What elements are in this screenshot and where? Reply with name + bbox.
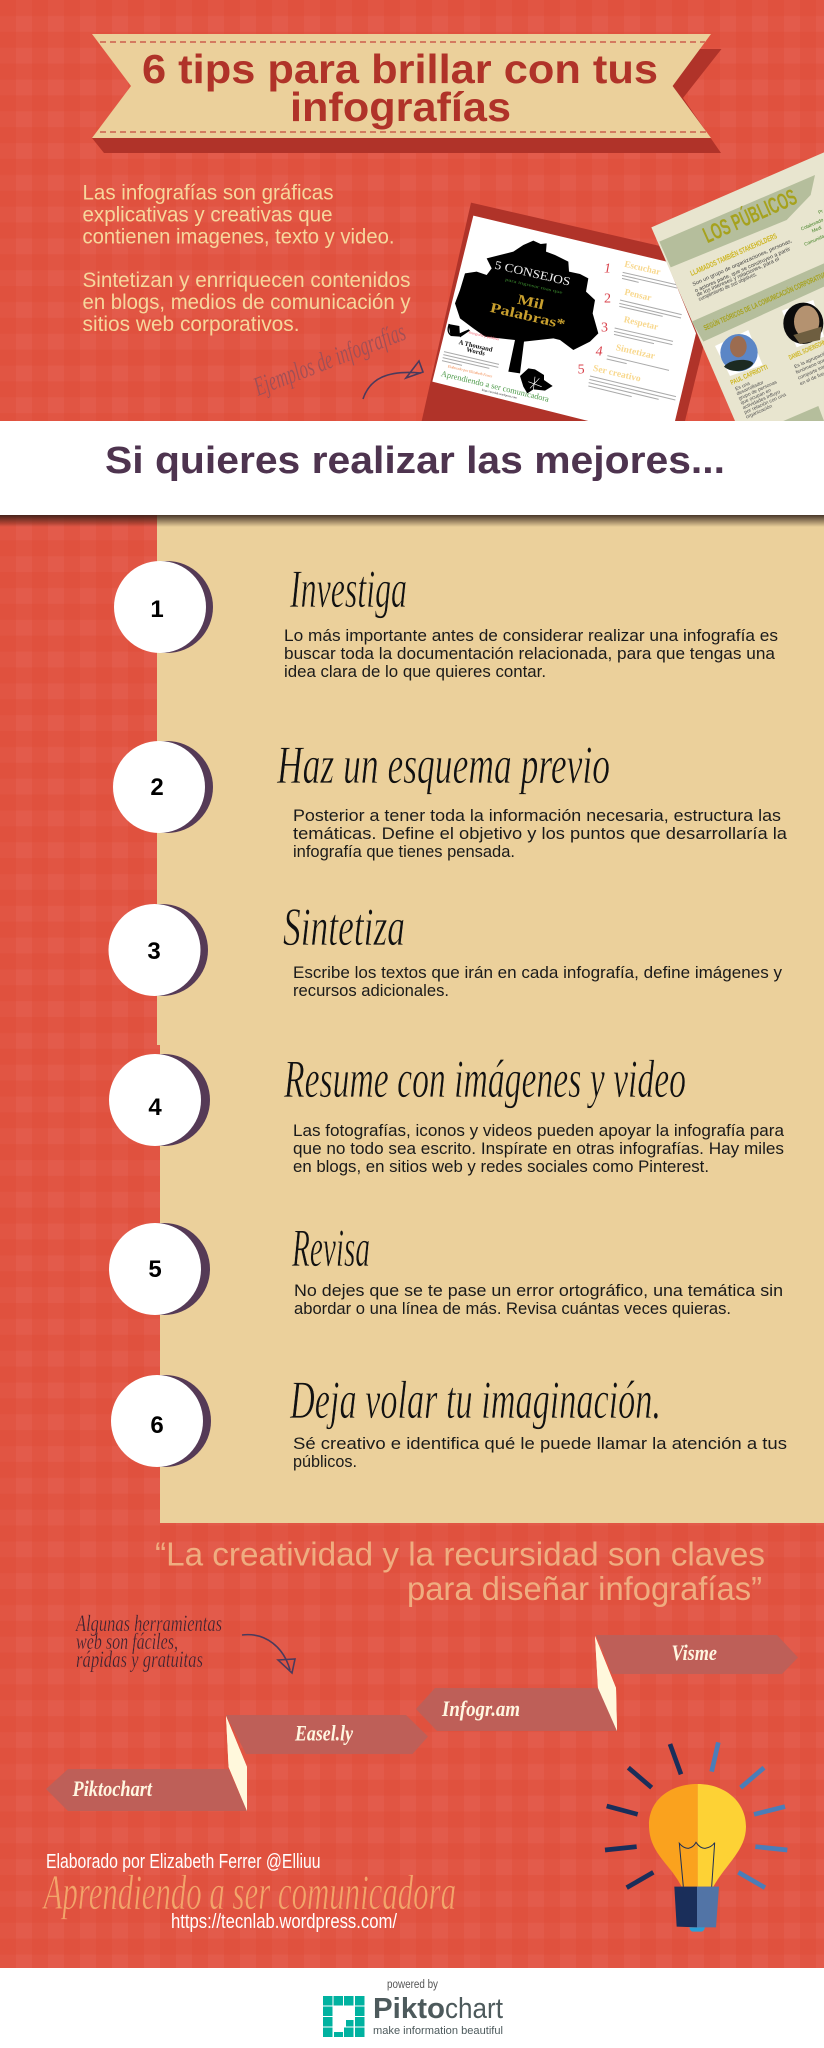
- five advice list: 2: [604, 292, 611, 307]
- quote: [155, 1536, 765, 1607]
- tip 1 body: buscar toda la documentación relacionada, para que tengas una: [284, 644, 776, 663]
- tip 3 body: Escribe los textos que irán en cada infografía, define imágenes y: [293, 963, 782, 982]
- intro text: explicativas y creativas que: [82, 202, 332, 226]
- number badge 6: 6: [150, 1412, 164, 1439]
- side notes: [800, 208, 824, 247]
- title: [142, 46, 658, 130]
- portrait bios: desarrollador: [736, 380, 765, 397]
- portrait bios: grupo de personas: [738, 379, 779, 402]
- number badge 5: [109, 1223, 210, 1315]
- tip 2 body: Posterior a tener toda la información necesaria, estructura las: [293, 806, 781, 825]
- portrait bios: Es una: [734, 381, 751, 392]
- thousand words note: Elaborado por Elizabeth Ferrer: [447, 364, 493, 379]
- tip 1 heading: Investiga: [289, 559, 407, 619]
- tool ribbon: Piktochart: [46, 1716, 247, 1811]
- thousand words note: A Thousand: [458, 339, 493, 354]
- tip 2 body: infografía que tienes pensada.: [293, 842, 515, 861]
- portrait names: PAUL CAPRIOTTI: [730, 364, 769, 387]
- portrait bios: [734, 349, 824, 420]
- tools arrow: [242, 1635, 295, 1673]
- portrait bios: por relación con una: [743, 392, 787, 416]
- piktochart logo mark: [323, 1996, 364, 2037]
- title: infografías: [290, 84, 511, 130]
- tree title text: 5 CONSEJOS: [493, 258, 572, 289]
- side notes: Pr: [817, 208, 824, 215]
- side notes: Medi: [811, 225, 822, 234]
- intro text: en blogs, medios de comunicación y: [82, 290, 411, 314]
- tip 4 body: Las fotografías, iconos y videos pueden apoyar la infografía para: [293, 1121, 785, 1140]
- tool ribbon: Visme: Visme: [672, 1640, 717, 1665]
- tip 5 heading: Revisa: [291, 1218, 370, 1278]
- number badge 4: [109, 1054, 210, 1146]
- five advice list: Respetar: [623, 315, 659, 333]
- tip 1: [114, 559, 778, 681]
- sheet subtitle: LLAMADOS TAMBIÉN STAKEHOLDERS: [689, 231, 778, 278]
- tip 1 body: idea clara de lo que quieres contar.: [284, 662, 546, 681]
- tip 3 body: recursos adicionales.: [293, 981, 449, 1000]
- five advice list: [578, 260, 682, 400]
- tree title text: [488, 258, 572, 333]
- tool ribbon: Visme: [595, 1635, 798, 1731]
- intro text: contienen imagenes, texto y video.: [82, 224, 394, 248]
- tip 2 body: [293, 806, 788, 861]
- icon: light bulb: [605, 1742, 787, 1932]
- credits: Elaborado por Elizabeth Ferrer @Elliuu: [46, 1851, 320, 1873]
- tip 5 body: No dejes que se te pase un error ortográfico, una temática sin: [294, 1281, 783, 1300]
- intro text: sitios web corporativos.: [82, 312, 300, 336]
- sheet paragraph: cumplimiento de sus objetivos.: [698, 272, 758, 303]
- credits: https://tecnlab.wordpress.com/: [171, 1911, 397, 1933]
- tools note: rápidas y gratuitas: [76, 1647, 203, 1672]
- powered by: powered by: [387, 1979, 438, 1991]
- tree title text: Mil: [516, 293, 545, 313]
- tip 2 heading: Haz un esquema previo: [276, 735, 610, 795]
- leaf icon: [520, 368, 553, 393]
- number badge 3: [108, 904, 208, 996]
- credits: [42, 1851, 456, 1933]
- sheet paragraph: de los intereses y relaciones, para el: [696, 256, 780, 298]
- tip 6 body: Sé creativo e identifica qué le puede llamar la atención a tus: [293, 1434, 787, 1453]
- five advice list: Escuchar: [623, 260, 661, 278]
- tools note: Algunas herramientas: [75, 1611, 222, 1636]
- handwritten note: ejemplos: Ejemplos de infografías: [249, 316, 410, 402]
- tip 1 body: Lo más importante antes de considerar realizar una infografía es: [284, 626, 778, 645]
- watering can icon: [448, 324, 470, 337]
- tips panel: [157, 515, 824, 1523]
- portrait 1: [715, 330, 763, 376]
- quote: para diseñar infografías”: [407, 1570, 762, 1607]
- intro text: [82, 180, 411, 336]
- thousand words note: [440, 330, 550, 404]
- white heading band: [0, 421, 824, 515]
- tip 2: [113, 735, 788, 861]
- number badge 6: [111, 1375, 211, 1467]
- sheet paragraph: Son un grupo de organizaciones, personas,: [692, 238, 793, 288]
- example infographic sheet 1: [422, 203, 707, 421]
- tools note: [75, 1611, 222, 1672]
- five advice list: 4: [596, 344, 603, 359]
- thousand words note: Fotografía y palabras: [468, 330, 500, 341]
- tools note: web son fáciles,: [76, 1629, 178, 1654]
- tool ribbon: Easel.ly: Easel.ly: [294, 1720, 353, 1746]
- piktochart wordmark: Pikto: [373, 1993, 445, 2025]
- number badge 2: [113, 741, 213, 833]
- sheet paragraph: [692, 238, 793, 303]
- five advice list: 5: [578, 362, 585, 377]
- portrait bios: actividades influyo: [742, 389, 782, 411]
- tip 6: [111, 1370, 787, 1471]
- title ribbon: [92, 34, 722, 153]
- five advice list: 3: [601, 320, 608, 335]
- number badge 5: 5: [148, 1256, 162, 1283]
- number badge 2: 2: [150, 774, 164, 801]
- intro text: Las infografías son gráficas: [82, 180, 334, 204]
- portrait bios: organización: [745, 403, 774, 420]
- example infographic sheet 2: [651, 152, 824, 421]
- tip 6 body: públicos.: [293, 1452, 357, 1471]
- tip 5 body: [294, 1281, 783, 1318]
- thousand words note: Words: [466, 346, 486, 358]
- tree title text: Palabras*: [488, 301, 567, 333]
- tip 4 body: en blogs, en sitios web y redes sociales como Pinterest.: [293, 1157, 709, 1176]
- section heading: Si quieres realizar las mejores...: [105, 440, 725, 482]
- tip 4: [109, 1049, 785, 1176]
- tool ribbon: Easel.ly: [226, 1715, 428, 1811]
- intro text: Sintetizan y enrriquecen contenidos: [82, 268, 410, 292]
- side notes: Colaborado: [800, 217, 824, 232]
- thousand words note: Aprendiendo a ser comunicadora: [440, 369, 550, 404]
- tip 4 body: que no todo sea escrito. Inspírate en otras infografías. Hay miles: [293, 1139, 784, 1158]
- tip 3 body: [293, 963, 782, 1000]
- number badge 1: 1: [150, 596, 164, 623]
- credits: Aprendiendo a ser comunicadora: [42, 1864, 456, 1920]
- tip 1 body: [284, 626, 778, 681]
- tool ribbon: Piktochart: Piktochart: [72, 1776, 153, 1801]
- tree silhouette: [455, 241, 598, 373]
- piktochart wordmark: chart: [445, 1993, 503, 2025]
- five advice list: Pensar: [623, 288, 652, 304]
- tip 6 body: [293, 1434, 787, 1471]
- footer: [0, 1968, 824, 2048]
- tool ribbon: Infogr.am: Infogr.am: [441, 1696, 520, 1721]
- thousand words note: https://tecnlab.wordpress.com: [481, 388, 518, 400]
- band shadow: [0, 515, 824, 527]
- tip 5 body: abordar o una línea de más. Revisa cuántas veces quieras.: [294, 1299, 731, 1318]
- portrait bios: que ocupan en: [740, 388, 772, 406]
- five advice list: Sintetizar: [615, 343, 656, 362]
- tip 5: [109, 1218, 783, 1318]
- tip 2 body: temáticas. Define el objetivo y los puntos que desarrollaría la: [293, 824, 788, 843]
- arrow to examples: [363, 361, 423, 399]
- tip 3 heading: Sintetiza: [283, 897, 405, 957]
- sheet paragraph: o actores parte, que se construyen a partir: [694, 246, 792, 294]
- piktochart wordmark: make information beautiful: [373, 2025, 503, 2037]
- number badge 1: [114, 561, 213, 653]
- five advice list: 1: [604, 262, 611, 277]
- number badge 4: 4: [148, 1094, 162, 1121]
- tree title text: para ingresar mas que: [505, 277, 563, 295]
- tip 4 body: [293, 1121, 785, 1176]
- portrait 2: [782, 300, 824, 347]
- number badge 3: 3: [147, 938, 161, 965]
- five advice list: Ser creativo: [592, 364, 642, 385]
- piktochart wordmark: [373, 1993, 503, 2037]
- tool ribbon: Infogr.am: [416, 1636, 617, 1731]
- tip 3: [108, 897, 782, 1000]
- title: 6 tips para brillar con tus: [142, 46, 658, 92]
- quote: “La creatividad y la recursidad son claves: [155, 1536, 765, 1572]
